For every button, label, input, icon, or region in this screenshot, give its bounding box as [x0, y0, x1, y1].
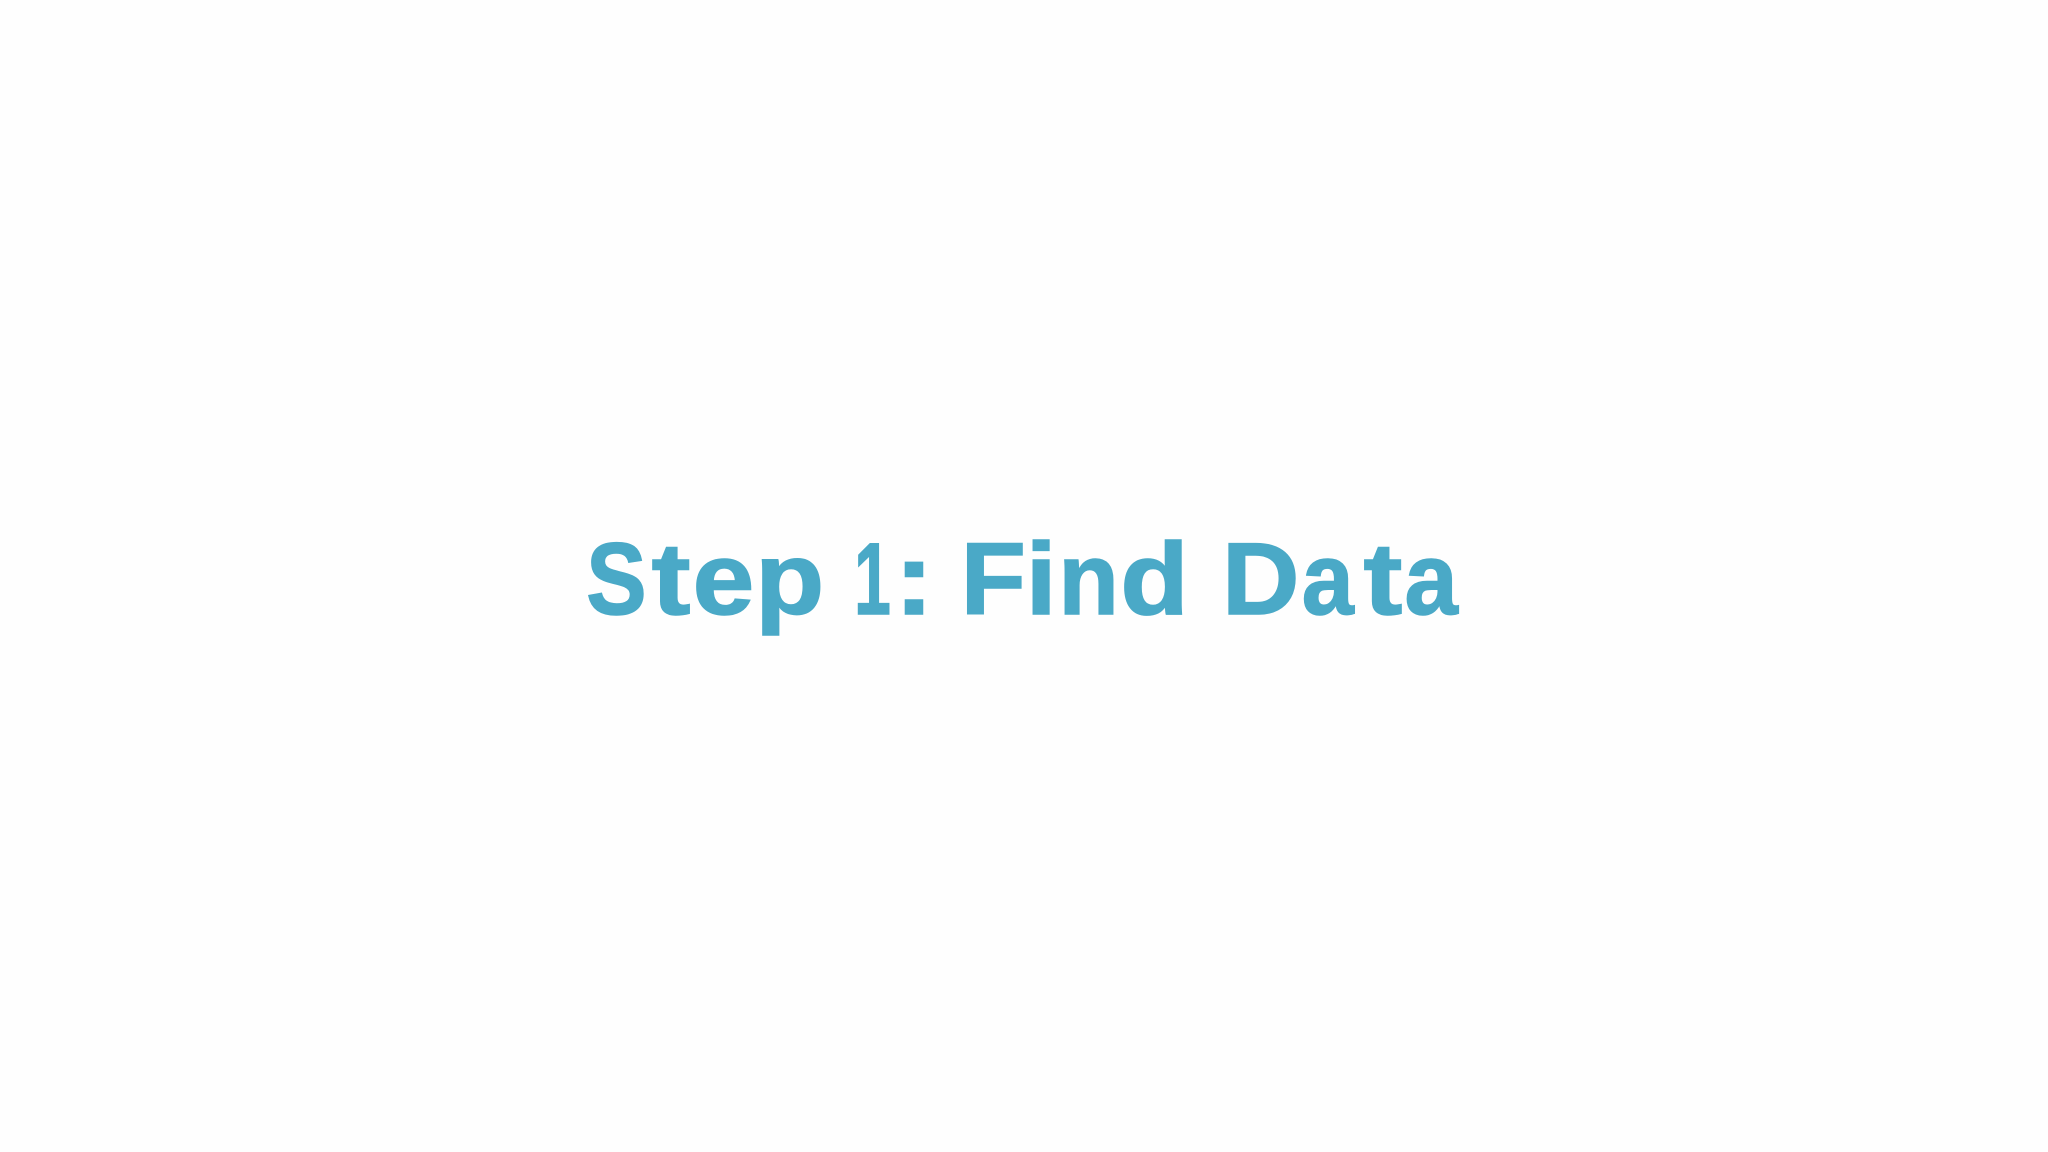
title: S: [586, 522, 647, 636]
title: D: [1222, 522, 1299, 636]
title: d: [1120, 522, 1189, 636]
title: a: [1302, 522, 1355, 636]
title: 1: [854, 522, 891, 636]
title: i: [1026, 522, 1057, 636]
title: e: [693, 522, 754, 636]
title: p: [755, 522, 824, 636]
title: t: [652, 522, 691, 636]
title: F: [961, 522, 1026, 636]
title: [586, 522, 1459, 636]
title: t: [1364, 522, 1402, 636]
title: :: [894, 522, 934, 636]
title: a: [1404, 522, 1459, 636]
title: n: [1058, 522, 1119, 636]
